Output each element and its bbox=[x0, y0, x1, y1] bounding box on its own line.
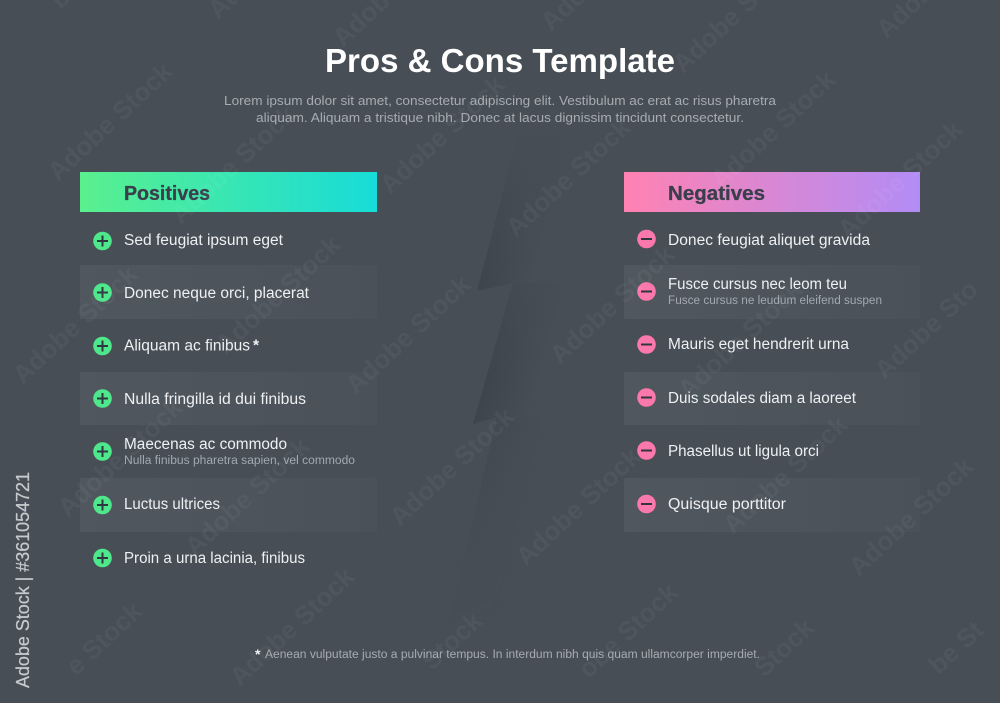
intro paragraph: Lorem ipsum dolor sit amet, consectetur adipiscing elit. Vestibulum ac erat ac risus pharetra bbox=[224, 93, 777, 108]
panel: positives bbox=[80, 172, 377, 567]
watermark pattern: Adobe Stock bbox=[374, 69, 511, 200]
positive item 3: Aliquam ac finibus bbox=[124, 338, 250, 354]
positive item 6 bbox=[93, 496, 220, 514]
watermark pattern: Adobe Stock bbox=[52, 392, 189, 523]
positive item 5: Nulla finibus pharetra sapien, vel commodo bbox=[124, 455, 355, 467]
watermark pattern: Adobe Stock bbox=[843, 451, 980, 582]
watermark pattern: Stock bbox=[416, 605, 488, 676]
watermark pattern: Adobe Stock bbox=[210, 229, 347, 360]
intro paragraph bbox=[224, 93, 777, 125]
watermark pattern: Adobe Stock bbox=[179, 431, 316, 562]
watermark pattern: Adobe Stock bbox=[832, 114, 969, 245]
lightning bolt divider bbox=[474, 251, 500, 424]
row band: negatives 2 bbox=[624, 265, 920, 319]
watermark pattern: Adobe Stock bbox=[705, 64, 842, 195]
intro paragraph: aliquam. Aliquam a tristique nibh. Donec at lacus dignissim tincidunt consectetur. bbox=[256, 110, 744, 125]
watermark pattern: Adobe Sto bbox=[868, 274, 984, 385]
footnote: Aenean vulputate justo a pulvinar tempus. In interdum nibh quis quam ullamcorper imperdiet. bbox=[265, 649, 760, 661]
footnote: * bbox=[255, 646, 261, 662]
positives header: Positives bbox=[124, 182, 210, 205]
negative item 2 bbox=[637, 276, 882, 307]
row band: positives 2 bbox=[80, 265, 377, 319]
negative item 1: Donec feugiat aliquet gravida bbox=[668, 232, 870, 249]
panel: negatives bbox=[624, 172, 920, 513]
watermark pattern: Adobe Stock bbox=[717, 409, 854, 540]
watermark pattern: obe Stock bbox=[572, 577, 684, 684]
watermark pattern: Adobe Stock bbox=[544, 239, 681, 370]
negative item 4: Duis sodales diam a laoreet bbox=[668, 390, 857, 407]
watermark pattern: Adobe Stock bbox=[224, 561, 361, 692]
watermark pattern: Adobe Stock bbox=[42, 56, 179, 187]
watermark pattern: Adobe Stock bbox=[500, 112, 637, 243]
negative item 6: Quisque porttitor bbox=[668, 496, 786, 513]
watermark pattern: Adobe Stock bbox=[510, 441, 647, 572]
watermark pattern: Adobe Stock bbox=[340, 269, 477, 400]
positive item 5 bbox=[93, 436, 355, 467]
watermark pattern: Adobe Stock bbox=[7, 259, 144, 390]
row band: positives 4 bbox=[80, 372, 377, 425]
row band: negatives 6 bbox=[624, 478, 920, 532]
watermark pattern: e Stock bbox=[60, 596, 148, 681]
stock id vertical label: Adobe Stock | #361054721 bbox=[13, 472, 33, 688]
negatives header bbox=[624, 172, 920, 212]
negative item 2: Fusce cursus ne leudum eleifend suspen bbox=[668, 295, 882, 307]
row band: positives 6 bbox=[80, 478, 377, 532]
watermark pattern: be St bbox=[922, 615, 990, 680]
watermark pattern: Adobe Stock bbox=[165, 99, 302, 230]
positive item 2: Donec neque orci, placerat bbox=[124, 285, 310, 302]
positive item 3: * bbox=[253, 338, 260, 354]
positive item 1: Sed feugiat ipsum eget bbox=[124, 232, 284, 249]
negative item 5: Phasellus ut ligula orci bbox=[668, 443, 819, 460]
watermark pattern: Adobe Stock bbox=[384, 401, 521, 532]
positive item 5: Maecenas ac commodo bbox=[124, 436, 287, 453]
row band: negatives 4 bbox=[624, 372, 920, 425]
positive item 4: Nulla fringilla id dui finibus bbox=[124, 391, 306, 408]
negatives header: Negatives bbox=[668, 182, 765, 205]
positive item 6: Luctus ultrices bbox=[124, 496, 220, 513]
positives header bbox=[80, 172, 377, 212]
watermark pattern: Stock bbox=[748, 612, 820, 683]
positive item 3 bbox=[93, 337, 260, 355]
negative item 2: Fusce cursus nec leom teu bbox=[668, 276, 847, 293]
watermark pattern: Adobe Stock bbox=[672, 274, 809, 405]
title: Pros & Cons Template bbox=[325, 42, 675, 79]
positive item 7: Proin a urna lacinia, finibus bbox=[124, 550, 305, 567]
negative item 3: Mauris eget hendrerit urna bbox=[668, 336, 849, 353]
